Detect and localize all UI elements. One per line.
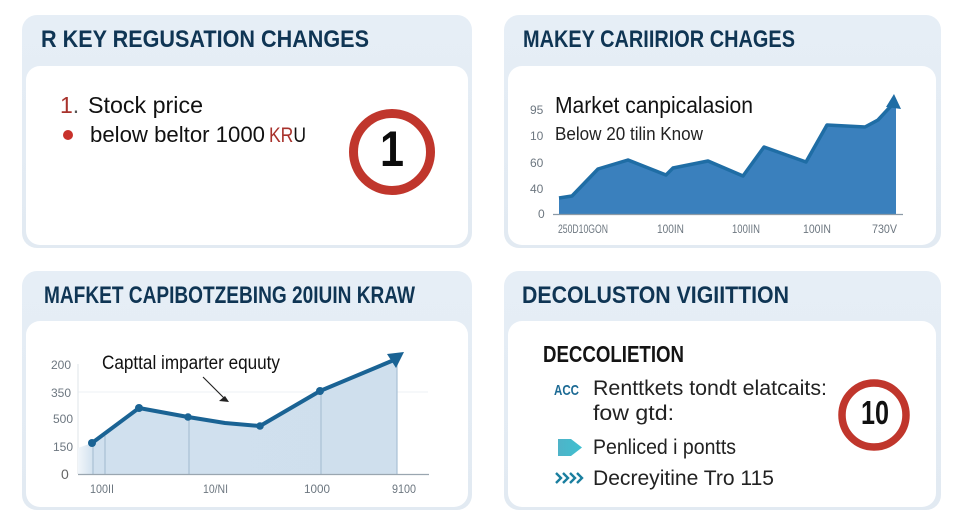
list item: third rule: Decreyitine Tro 115 (593, 467, 774, 490)
icon: red circle badge 10: 10 (861, 394, 889, 431)
line chart: capital impairment (51, 352, 429, 496)
panel: market capitalisation changes (504, 15, 941, 248)
text block: stock price rule: KRU (269, 124, 306, 147)
arrow head (387, 352, 404, 368)
heading: market capitalisation changes: MAKEY CARIIRIOR CHAGES (523, 26, 795, 53)
line chart: capital impairment: 350 (51, 386, 71, 400)
area chart: market capitalisation: 100IIN (732, 222, 760, 236)
panel: market capitalisation below 20 trillion (22, 271, 472, 510)
heading: market capitalisation below 20 trillion: MAFKET CAPIBOTZEBING 20IUIN KRAW (44, 282, 415, 309)
text block: chart label: Below 20 tilin Know (555, 124, 704, 144)
line chart: capital impairment: 500 (53, 412, 73, 426)
text block: stock price rule (60, 92, 306, 147)
area chart: market capitalisation: 60 (530, 156, 544, 170)
line chart: capital impairment: 10/NI (203, 482, 228, 496)
arrow: annotation pointer (203, 377, 229, 402)
area chart: market capitalisation: 250D10GON (558, 222, 608, 236)
list item: first rule: Renttkets tondt elatcaits: (593, 377, 827, 400)
text block: chart label (555, 92, 753, 144)
line chart: capital impairment: 150 (53, 440, 73, 454)
area chart: market capitalisation: 10 (530, 129, 544, 143)
area chart: market capitalisation: 40 (530, 182, 544, 196)
line chart: capital impairment: 100II (90, 482, 114, 496)
list item: first rule: fow gtd: (593, 402, 674, 425)
area chart: market capitalisation: 100IN (657, 222, 684, 236)
text block: stock price rule: Stock price (88, 92, 203, 118)
icon: teal tag arrow (558, 439, 582, 456)
area chart: market capitalisation (530, 94, 903, 236)
area chart: market capitalisation: 730V (872, 222, 897, 236)
icon: chevrons (556, 473, 582, 483)
area chart: market capitalisation: 0 (538, 207, 545, 221)
heading: key regulation changes: R KEY REGUSATION CHANGES (41, 26, 369, 53)
panel: key regulation changes (22, 15, 472, 248)
line chart: capital impairment: 1000 (304, 482, 330, 496)
icon: small glyph: ACC (554, 382, 579, 399)
text block: chart annotation: Capttal imparter equuty (102, 353, 280, 374)
arrow head (886, 94, 901, 109)
text block: stock price rule: below beltor 1000 (90, 122, 265, 147)
line chart: capital impairment: 0 (61, 466, 69, 482)
list item: second rule: Penliced i pontts (593, 436, 736, 459)
icon: red circle badge 10 (842, 383, 906, 447)
text block: chart label: Market canpicalasion (555, 92, 753, 118)
line chart: capital impairment: 200 (51, 358, 71, 372)
text block: stock price rule: 1. (60, 92, 79, 118)
icon: red circle badge 1: 1 (380, 121, 404, 177)
line chart: capital impairment: 9100 (392, 482, 416, 496)
list item: first rule (554, 377, 827, 425)
icon: red circle badge 1 (354, 114, 430, 190)
panel: decolistion vigilation (504, 271, 941, 510)
subheading: decolietion: DECCOLIETION (543, 341, 684, 367)
area chart: market capitalisation: 95 (530, 103, 544, 117)
heading: decolistion vigilation: DECOLUSTON VIGIITTION (522, 282, 789, 309)
area chart: market capitalisation: 100IN (803, 222, 831, 236)
